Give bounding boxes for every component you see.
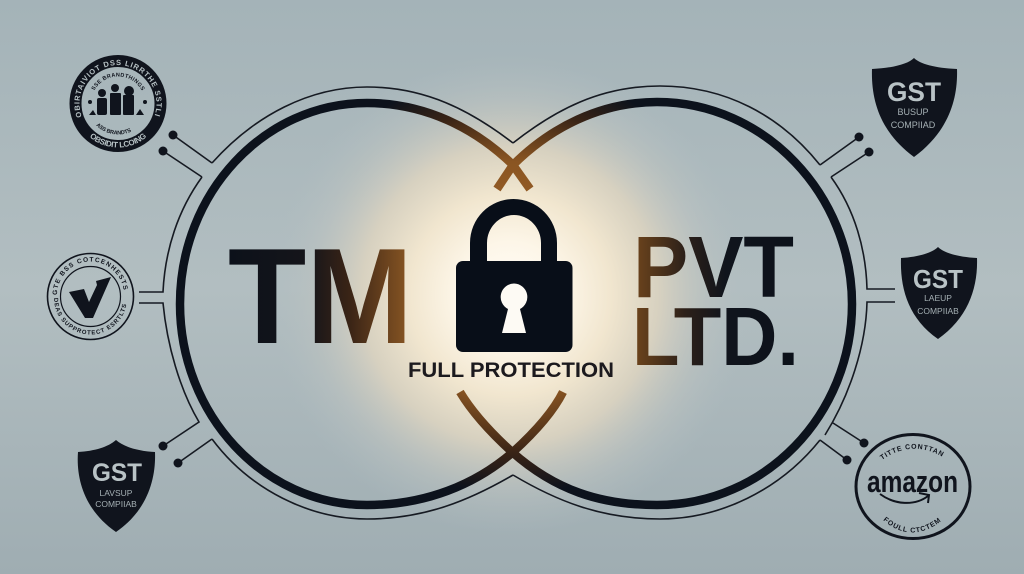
badge: top-left seal: OBIRTAIVIOT DSS LIRRTHE SSTLI [74, 60, 162, 118]
badge: middle-right GST shield [901, 247, 977, 339]
badge: bottom-right amazon seal: amazon [867, 464, 958, 499]
badge: top-right GST shield: COMPIIAD [891, 120, 936, 130]
badge: top-left seal: ASS BRANDTS [96, 124, 131, 134]
badge: bottom-right amazon seal: TITTE CONTTAN [880, 444, 944, 460]
badge: top-left seal: OBSIDIT LCOING [90, 134, 146, 148]
badge: bottom-left GST shield [78, 440, 155, 532]
icon: keyhole [501, 284, 527, 333]
badge: top-left seal [70, 55, 166, 152]
icon: smile arrow [880, 493, 929, 503]
badge: middle-right GST shield: LAEUP [924, 293, 952, 303]
heading: TM: TM [228, 220, 413, 372]
badge: middle-left checkmark seal [46, 252, 134, 340]
badge: middle-right GST shield: GST [913, 264, 963, 294]
badge: bottom-left GST shield: LAVSUP [100, 488, 133, 498]
connector dots: left [158, 130, 182, 468]
thin outer ring left [139, 87, 513, 519]
badge: bottom-right amazon seal: FOULL CTCTEM [883, 516, 940, 532]
badge: middle-right GST shield: COMPIIAB [917, 306, 959, 316]
heading: LTD.: LTD. [632, 290, 799, 383]
badge: top-right GST shield: BUSUP [897, 107, 929, 117]
badge: top-right GST shield: GST [887, 77, 941, 107]
icon: check [69, 277, 111, 318]
badge: top-right GST shield [872, 58, 957, 157]
icon: padlock [456, 199, 572, 352]
badge: bottom-left GST shield: GST [92, 459, 142, 487]
heading: PVT: PVT [633, 219, 794, 316]
icon: people [88, 84, 147, 115]
badge: middle-left checkmark seal: GTE BSS COTCENHESTS [52, 257, 128, 295]
thin outer ring right [513, 86, 895, 519]
label: FULL PROTECTION: FULL PROTECTION [408, 358, 614, 382]
connector dots: right [842, 132, 874, 464]
badge: bottom-right amazon seal [854, 433, 972, 540]
diagram: interlocking rings [139, 86, 895, 519]
thick ring right [460, 102, 852, 505]
thick ring left [180, 103, 563, 505]
badge: middle-left checkmark seal: DEAS SUPPROTECT ESRTLTS [54, 298, 126, 334]
badge: bottom-left GST shield: COMPIIAB [95, 499, 137, 509]
badge: top-left seal: SSE BRANDTHINGS [92, 72, 145, 90]
